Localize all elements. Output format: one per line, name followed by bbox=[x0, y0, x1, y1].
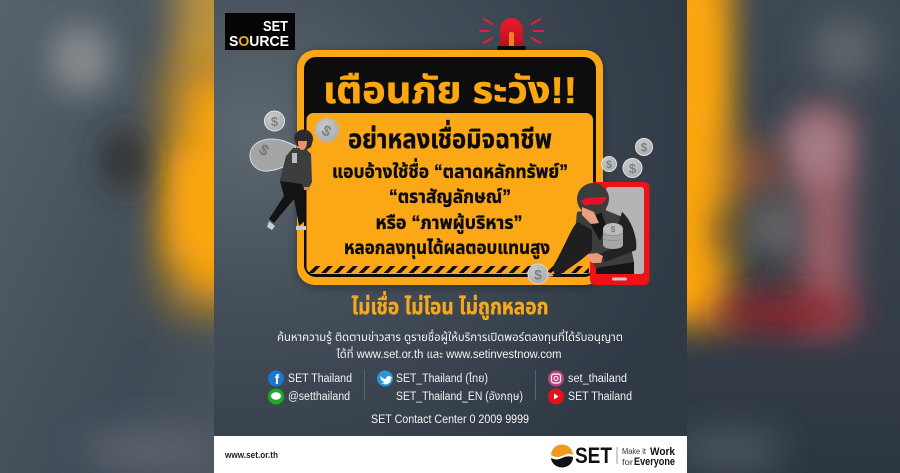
illustration: phone bbox=[590, 182, 650, 285]
social: line: @setthailand bbox=[288, 391, 350, 403]
social: line bbox=[268, 388, 350, 404]
blurred background: right bbox=[687, 0, 900, 473]
SET logo: Make it bbox=[622, 447, 647, 456]
footer bar bbox=[214, 436, 687, 473]
illustration: masked thief reaching out of phone bbox=[544, 183, 636, 277]
coins right: $ bbox=[606, 159, 612, 171]
SET logo: for bbox=[622, 458, 633, 467]
social: twitter bbox=[377, 370, 523, 403]
coins right: $ bbox=[629, 161, 637, 176]
illustration: thief with money bag: $ bbox=[256, 141, 272, 160]
social: youtube bbox=[548, 388, 632, 404]
illustration: masked thief reaching out of phone: $ bbox=[611, 225, 616, 234]
coin in hand: $ bbox=[534, 266, 542, 282]
slogan: ไม่เชื่อ ไม่โอน ไม่ถูกหลอก bbox=[352, 291, 548, 320]
icon: red siren bbox=[480, 18, 543, 50]
coins left: $ bbox=[318, 122, 335, 141]
SET logo bbox=[551, 443, 676, 468]
sign body text: อย่าหลงเชื่อมิจฉาชีพ bbox=[348, 120, 552, 154]
info text bbox=[277, 329, 623, 361]
footer url: www.set.or.th bbox=[224, 450, 278, 460]
sign body text bbox=[332, 120, 568, 259]
SET logo: Everyone bbox=[634, 456, 675, 468]
SET logo: SET bbox=[575, 443, 612, 468]
social: facebook: f bbox=[275, 371, 280, 387]
sign body text: หรือ “ภาพผู้บริหาร” bbox=[376, 212, 522, 234]
social: twitter: SET_Thailand (ไทย) bbox=[396, 372, 488, 385]
hazard stripes bbox=[309, 266, 589, 273]
social: twitter: SET_Thailand_EN (อังกฤษ) bbox=[396, 390, 523, 403]
logo: SET Source: SET bbox=[263, 18, 288, 35]
contact center: SET Contact Center 0 2009 9999 bbox=[371, 414, 529, 426]
social: instagram: set_thailand bbox=[568, 373, 627, 385]
coins left: $ bbox=[271, 114, 279, 129]
coins left bbox=[264, 111, 339, 142]
info text: ได้ที่ www.set.or.th และ www.setinvestnow.com bbox=[336, 346, 562, 361]
social: youtube: SET Thailand bbox=[568, 391, 632, 403]
illustration: thief with money bag bbox=[250, 129, 313, 230]
sign body text: “ตราสัญลักษณ์” bbox=[389, 187, 511, 208]
logo: SET Source: SOURCE bbox=[229, 33, 289, 50]
social: instagram bbox=[548, 370, 627, 386]
sign body text: หลอกลงทุนได้ผลตอบแทนสูง bbox=[344, 237, 550, 259]
sign title: เตือนภัย ระวัง!! bbox=[323, 70, 577, 111]
coins right: $ bbox=[641, 140, 648, 154]
social: facebook bbox=[268, 370, 352, 387]
info text: ค้นหาความรู้ ติดตามข่าวสาร ดูรายชื่อผู้ให้บริการเปิดพอร์ตลงทุนที่ได้รับอนุญาต bbox=[277, 329, 623, 344]
warning sign panel bbox=[297, 50, 603, 285]
blurred background: left bbox=[0, 0, 214, 473]
coin in hand bbox=[528, 264, 548, 284]
sign body text: แอบอ้างใช้ชื่อ “ตลาดหลักทรัพย์” bbox=[332, 158, 568, 183]
central panel background bbox=[214, 0, 687, 436]
SET logo: Work bbox=[650, 446, 676, 458]
social: facebook: SET Thailand bbox=[288, 373, 352, 385]
coins right bbox=[602, 138, 652, 178]
logo: SET Source bbox=[225, 13, 295, 50]
